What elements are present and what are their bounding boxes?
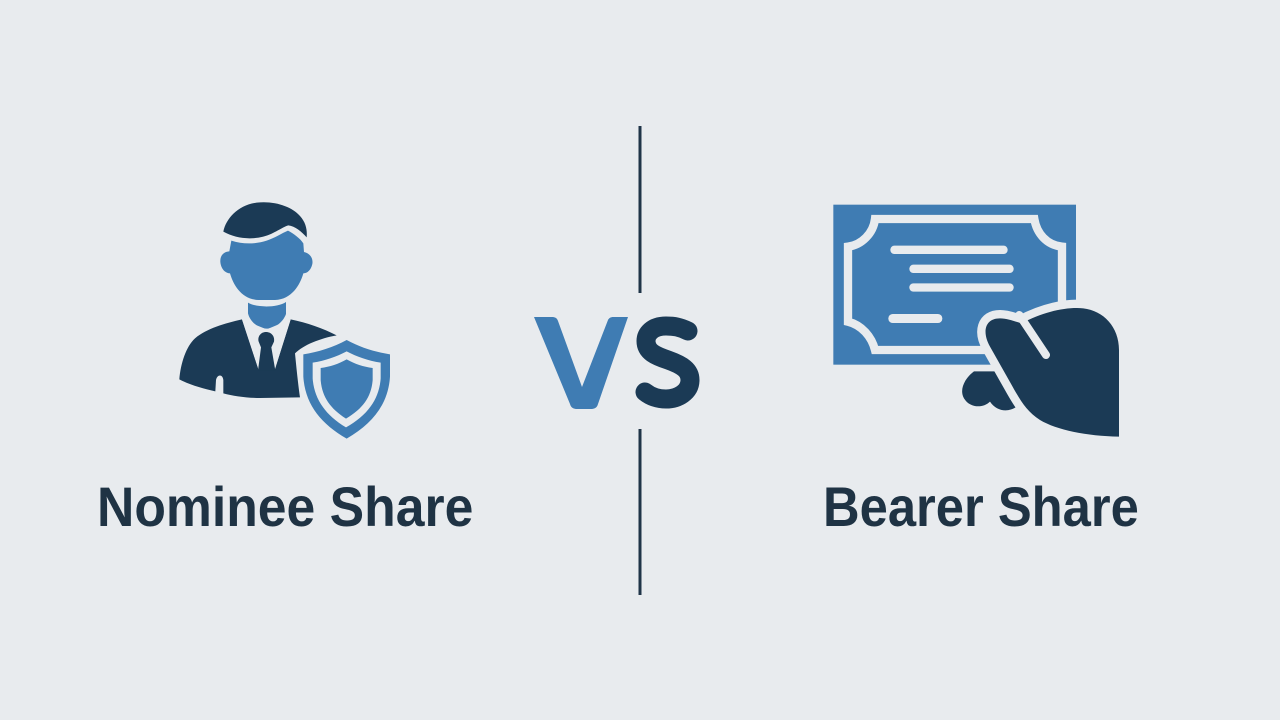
fingers [962, 371, 1017, 410]
divider: top vertical line [638, 126, 642, 293]
collar [242, 319, 291, 370]
hand [986, 308, 1119, 437]
VS mark [534, 317, 690, 409]
text lines [888, 246, 1014, 323]
shield outer [303, 340, 390, 439]
certificate body [833, 205, 1076, 365]
letter S [645, 326, 690, 399]
icon: nominee person with shield [179, 202, 390, 439]
neck [248, 302, 286, 329]
hair [223, 202, 307, 238]
letter V [534, 317, 628, 409]
line 1 [890, 246, 1008, 254]
icon: bearer share certificate in hand [833, 205, 1119, 437]
line 4 [888, 314, 942, 323]
suit jacket [179, 319, 337, 398]
shield [303, 340, 390, 439]
shield core [321, 359, 373, 419]
divider: bottom vertical line [638, 429, 642, 595]
line 2 [909, 265, 1014, 273]
shield inner ring [313, 351, 381, 427]
tie [258, 332, 275, 371]
heading: Nominee Share: Nominee Share [97, 475, 473, 538]
finger separation [1019, 315, 1046, 355]
heading: Bearer Share: Bearer Share [823, 475, 1139, 538]
certificate ornate border [848, 219, 1062, 350]
line 3 [909, 283, 1014, 292]
face and ears [220, 231, 313, 300]
